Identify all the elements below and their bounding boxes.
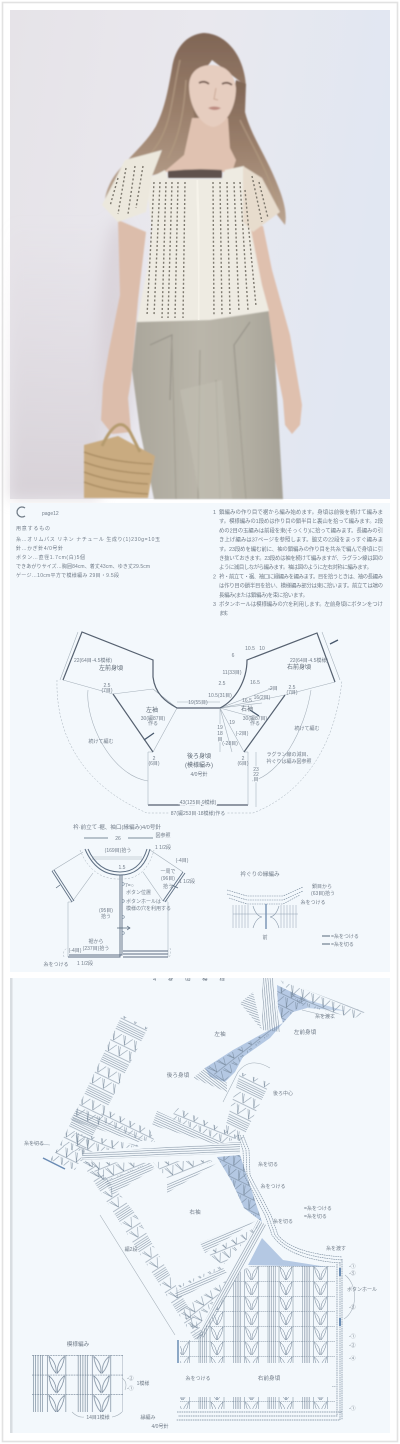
border diagram labels: ボタンホールは — [126, 898, 161, 905]
schematic labels: 22(64目·4.5模様) — [290, 657, 328, 664]
materials text: 針…かぎ針4/0号針 — [16, 545, 63, 552]
stitch chart labels: -① — [349, 1405, 356, 1412]
schematic labels: 左前身頃 — [99, 664, 123, 672]
pattern swatch — [32, 1355, 126, 1417]
schematic labels — [74, 646, 328, 817]
stitch chart labels: 糸をつける — [260, 1183, 286, 1190]
stitch chart labels: 右前身頃 — [258, 1374, 281, 1382]
stitch chart labels: 1模様 — [137, 1380, 149, 1387]
panel: full stitch chart — [10, 975, 390, 1433]
schematic labels: 30(編87目) — [243, 715, 268, 722]
materials text: ボタン…直径1.7cm(白)5個 — [16, 554, 85, 561]
instruction steps: 3 — [213, 602, 216, 608]
schematic labels: 16.5 — [250, 680, 260, 686]
chart labels: 鎖目から — [312, 883, 332, 890]
schematic labels: 2 — [242, 756, 245, 762]
stitch chart labels: 糸を渡す — [326, 1245, 346, 1252]
cut-off page text: 4 身 頃 模 様 — [153, 975, 225, 983]
stitch chart labels: 14目1模様 — [86, 1414, 110, 1421]
instruction steps: き抜いておきます。23段めは袖を続けて編みますが、ラグラン線は図の — [219, 554, 383, 562]
button band — [197, 180, 199, 320]
basket — [84, 436, 155, 498]
arm: right — [243, 226, 302, 434]
stitch chart labels: 後ろ身頃 — [167, 1071, 190, 1079]
stitch chart labels: 糸を切る — [24, 1140, 44, 1147]
chart labels: 衿ぐりの縁編み — [240, 870, 280, 878]
instruction steps: 1 — [213, 510, 216, 516]
stitch chart labels: 左袖 — [214, 1030, 226, 1038]
stitch chart labels: =糸をつける — [304, 1205, 332, 1212]
schematic labels: 右前身頃 — [287, 663, 311, 671]
schematic: border diagram — [52, 838, 185, 958]
border diagram labels: 1 1/2段 — [77, 960, 93, 967]
schematic labels: 左袖 — [146, 706, 158, 714]
border diagram labels: ボタン位置 — [126, 889, 151, 896]
stitch chart labels: 縁編み — [140, 1414, 156, 1421]
hair strands — [118, 60, 278, 206]
stitch chart labels: 糸を切る — [273, 1218, 293, 1225]
eyes and lips — [199, 82, 232, 85]
instruction steps: す。模様編みの1段めは作り目の鎖半目と裏山を拾って編みます。2段 — [219, 517, 384, 525]
instruction steps: めの2目の玉編みは前段を束(そっくり)に拾って編みます。長編みの引 — [219, 526, 383, 534]
stitch chart labels: 糸を渡す — [315, 1013, 335, 1020]
instruction steps: は作り目の鎖半目を拾い、模様編み部分は束に拾います。前立ては端の — [219, 582, 383, 590]
schematic labels: 18 — [217, 731, 223, 737]
chart labels: 糸をつける — [300, 899, 326, 906]
border diagram labels: 図参照 — [155, 832, 171, 839]
chart labels: (63目)拾う — [311, 890, 335, 897]
schematic labels: 2.5 — [104, 683, 111, 689]
chart labels — [240, 870, 359, 948]
materials text: できあがりサイズ…胸囲84cm、着丈43cm、ゆき丈29.5cm — [16, 563, 150, 570]
schematic labels: 43(125目·9模様) — [180, 799, 217, 806]
schematic labels: 2.5 — [219, 681, 226, 687]
wall shadow — [10, 220, 136, 499]
schematic labels: (-2目) — [236, 731, 249, 737]
schematic labels: (6目) — [237, 761, 249, 767]
stitch chart labels: -② — [127, 1375, 134, 1382]
right front body block — [30, 1010, 355, 1420]
instruction steps: ように減目しながら編みます。袖は図のように左右対称に編みます。 — [219, 563, 372, 571]
schematic labels: 続けて編む — [88, 738, 114, 745]
panel: model photo — [10, 10, 390, 499]
crochet eyelets — [110, 166, 268, 318]
schematic labels: (-28目) — [222, 741, 238, 747]
schematic labels: 11(33目) — [222, 670, 242, 676]
materials text: page12 — [42, 511, 59, 517]
border diagram labels: 拾う — [101, 913, 111, 920]
stitch chart labels: 模様編み — [67, 1340, 90, 1348]
border diagram labels: 模様の穴を利用する — [126, 905, 171, 912]
stitch chart labels: 右袖 — [189, 1208, 201, 1216]
schematic labels: 30(編87目) — [141, 715, 166, 722]
schematic labels: 続けて編む — [294, 725, 320, 732]
border diagram labels: 糸をつける — [43, 961, 69, 968]
stitch chart labels: -② — [349, 1342, 356, 1349]
stitch chart labels: 糸を切る — [258, 1161, 278, 1168]
border diagram labels: 26 — [115, 836, 121, 842]
schematic labels: 6 — [232, 653, 235, 659]
stitch chart labels: -① — [127, 1385, 134, 1392]
schematic labels: 19 — [229, 720, 235, 726]
border diagram labels: (169目)拾う — [105, 847, 131, 854]
border diagram labels: (-4目) — [69, 948, 82, 954]
border diagram labels: (237目)拾う — [83, 945, 109, 952]
stitch strips: left front and sleeve — [193, 978, 365, 1092]
neckline stitch chart — [227, 887, 330, 944]
materials text — [16, 511, 160, 579]
materials text: ゲージ…10cm平方で模様編み 29目・9.5段 — [16, 572, 119, 579]
schematic labels: 22(64目·4.5模様) — [74, 657, 112, 664]
stitch chart labels: 後ろ中心 — [273, 1090, 293, 1097]
instruction steps: ます。 — [219, 610, 231, 617]
schematic labels: 4/0号針 — [191, 771, 207, 778]
border diagram labels: 一周で — [160, 869, 176, 875]
stitch chart labels — [24, 1013, 377, 1430]
schematic labels: 作る — [250, 720, 260, 727]
schematic labels: 2.5 — [289, 685, 296, 691]
stitch chart labels: 左前身頃 — [294, 1028, 317, 1036]
schematic labels: 19 — [217, 725, 223, 731]
stitch chart labels: 4/0号針 — [152, 1423, 168, 1430]
schematic: main garment layout — [57, 632, 342, 813]
blue shaded patch: right front neck — [248, 1238, 327, 1267]
border diagram labels: 1 1/2段 — [179, 878, 195, 885]
hair behind face — [188, 85, 242, 130]
hair: crown and left side — [105, 33, 246, 208]
instruction steps: 長編み(または鎖編み)を束に拾います。 — [219, 591, 308, 599]
crochet body — [137, 166, 269, 322]
hair: right side — [226, 80, 286, 225]
materials text: 糸…オリムパス リネン ナチュール 生成り(1)230g=10玉 — [16, 536, 160, 543]
border diagram labels: 裾から — [88, 938, 104, 945]
schematic labels: 10.5(31目) — [208, 693, 232, 699]
instruction steps: ボタンホールは模様編みの穴を利用します。左前身頃にボタンをつけ — [219, 600, 383, 608]
arm: left — [101, 220, 146, 434]
border diagram labels: 1 1/2段 — [155, 844, 171, 851]
instruction steps — [213, 508, 384, 617]
schematic labels: 22 — [253, 772, 259, 778]
schematic labels: 作る — [148, 720, 158, 727]
blue shaded patch: right sleeve raglan — [217, 1135, 342, 1263]
stitch chart labels: -④ — [349, 1355, 356, 1362]
stitch chart labels: 糸をつける — [185, 1375, 211, 1382]
logo mark — [17, 507, 25, 517]
instruction steps: 2 — [213, 574, 216, 580]
face — [189, 65, 236, 127]
border diagram labels: (-4目) — [176, 858, 189, 864]
camisole — [168, 169, 222, 178]
border diagram labels — [43, 823, 195, 968]
schematic labels: 目 — [217, 737, 223, 743]
neck and chest — [164, 118, 236, 172]
binding shadow — [10, 978, 12, 1433]
border diagram labels: 拾う — [163, 883, 173, 890]
chart labels: =糸をつける — [331, 933, 359, 940]
stitch chart labels: -⑤ — [349, 1304, 356, 1311]
stitch strips: back and sleeves — [43, 1015, 270, 1340]
skirt — [132, 308, 283, 499]
materials text: 用意するもの — [16, 525, 50, 532]
border diagram labels: (95目) — [99, 908, 113, 914]
instruction steps: す。23段めを編む前に、袖の鎖編みの作り目を共糸で編んで身頃に引 — [219, 545, 383, 553]
border diagram labels: 7=○ — [125, 883, 134, 889]
schematic labels: (7目) — [101, 688, 113, 694]
model figure — [84, 33, 302, 499]
schematic labels: 目 — [253, 777, 259, 783]
panel: instructions and schematic — [10, 503, 390, 972]
stitch chart labels: 編2段 — [125, 1246, 137, 1253]
schematic labels: 2 — [153, 756, 156, 762]
schematic labels: 23 — [253, 767, 259, 773]
schematic labels: 16.5 — [242, 698, 252, 704]
schematic labels: 10 — [259, 646, 265, 652]
instruction steps: 鎖編みの作り目で裾から編み始めます。身頃は前後を続けて編みま — [219, 508, 383, 516]
schematic labels: 右袖 — [241, 705, 253, 713]
crochet sleeves — [102, 150, 162, 222]
instruction steps: 衿・前立て・裾、袖口に縁編みを編みます。目を拾うときは、袖の長編み — [219, 572, 384, 580]
border diagram labels: 衿·前立て·裾、袖口(縁編み)4/0号針 — [73, 823, 161, 831]
stitch chart labels: -① — [349, 1263, 356, 1270]
schematic labels: (6目) — [148, 761, 160, 767]
schematic labels: 87(編253目·18模様)作る — [171, 810, 225, 817]
schematic labels: ラグラン線の減目、 — [266, 751, 312, 758]
stitch chart labels: ボタンホール — [347, 1286, 377, 1293]
stitch chart labels: -⑤ — [349, 1270, 356, 1277]
schematic labels: 10.5 — [245, 646, 255, 652]
border diagram labels: (96目) — [161, 876, 175, 882]
stitch chart labels: -① — [349, 1333, 356, 1340]
schematic labels: (模様編み) — [185, 761, 213, 769]
stitch chart labels: =糸を切る — [304, 1213, 327, 1220]
schematic labels: 後ろ身頃 — [187, 752, 211, 760]
schematic labels: 19(55目) — [188, 700, 208, 706]
schematic labels: 衿ぐりは編み図参照 — [266, 758, 312, 765]
instruction steps: き上げ編みは37ページを参照します。脇丈の22段をまっすぐ編みま — [219, 536, 383, 544]
schematic labels: 16(2目) — [254, 695, 271, 701]
chart labels: 前 — [262, 934, 268, 941]
schematic labels: -2目 — [268, 686, 278, 692]
chart labels: =糸を切る — [331, 941, 354, 948]
schematic labels: (7目) — [286, 690, 298, 696]
border diagram labels: 1.5 — [119, 865, 126, 871]
